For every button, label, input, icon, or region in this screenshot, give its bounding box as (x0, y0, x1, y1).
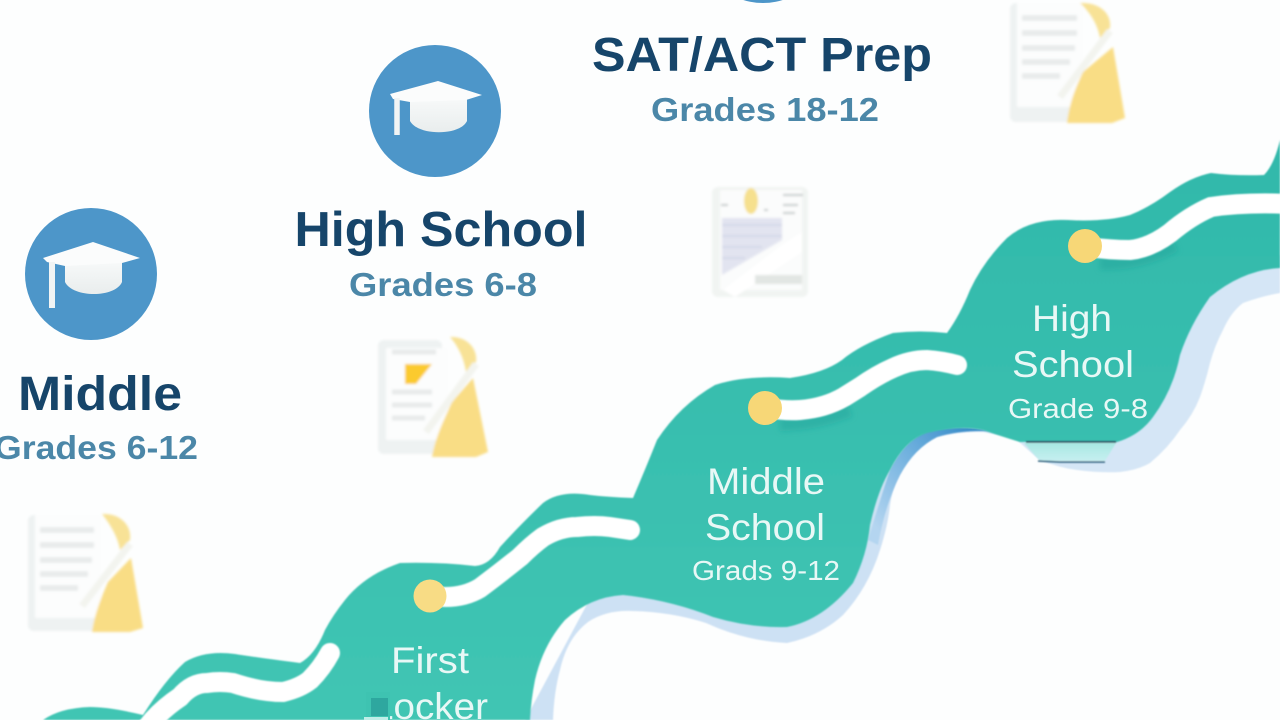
icon: document high school (378, 337, 488, 457)
ribbon track shading (780, 245, 1175, 424)
ribbon white track 3 (768, 360, 957, 410)
icon: document top right (1010, 3, 1125, 123)
heading: middle: Middle (18, 368, 182, 421)
school text: School (705, 507, 825, 548)
ribbon label: middle school (692, 461, 840, 586)
school text: School (1012, 344, 1134, 385)
ribbon label: high school: High (1032, 298, 1112, 339)
ribbon shadow left (525, 410, 1000, 720)
ribbon white track 1 (145, 653, 330, 720)
grades text: Grads 9-12 (692, 555, 840, 586)
subheading: grades 6-8: Grades 6-8 (349, 266, 537, 303)
icon: graduation cap middle (25, 208, 157, 340)
heading: SAT/ACT prep: SAT/ACT Prep (592, 29, 932, 82)
ribbon label: high school (1008, 298, 1148, 424)
ribbon body (43, 140, 1280, 720)
heading: high school: High School (294, 203, 588, 257)
locker text glitch (364, 692, 390, 720)
ribbon label: first locker (372, 640, 488, 720)
milestone dot: high school (1068, 229, 1102, 263)
icon: partial circle top (697, 0, 829, 3)
ribbon label: first locker: First (391, 640, 470, 681)
ribbon path (43, 140, 1280, 720)
icon: document middle (28, 514, 143, 632)
grades text: Grade 9-8 (1008, 393, 1148, 424)
ribbon white track 4 (1088, 203, 1280, 250)
icon: document centre (712, 187, 808, 297)
icon: graduation cap high school (369, 45, 501, 177)
milestone dot: first locker (414, 580, 446, 612)
ribbon artifact (1024, 442, 1116, 462)
ribbon label: middle school: Middle (707, 461, 825, 502)
ribbon shadow right (1015, 255, 1280, 472)
ribbon blue edge (868, 428, 990, 545)
ribbon white track 2 (432, 526, 630, 597)
subheading: grades 18-12: Grades 18-12 (651, 91, 879, 128)
milestone dot: middle school (748, 391, 782, 425)
